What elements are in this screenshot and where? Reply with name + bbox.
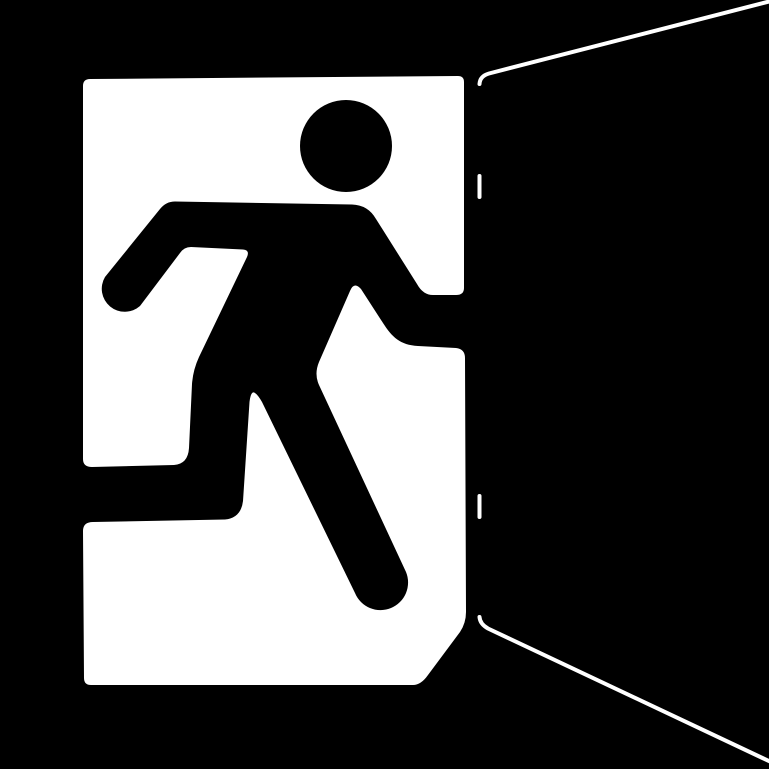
icon: head: [300, 100, 392, 192]
icon: white doorway with running figure cut-out: [83, 76, 464, 467]
icon: open door outline: [480, 1, 769, 762]
door upper hinge: [478, 176, 482, 197]
door bottom edge: [480, 617, 769, 762]
icon: white lower door area: [83, 285, 466, 685]
door lower hinge: [478, 496, 482, 517]
door top edge: [480, 1, 769, 84]
